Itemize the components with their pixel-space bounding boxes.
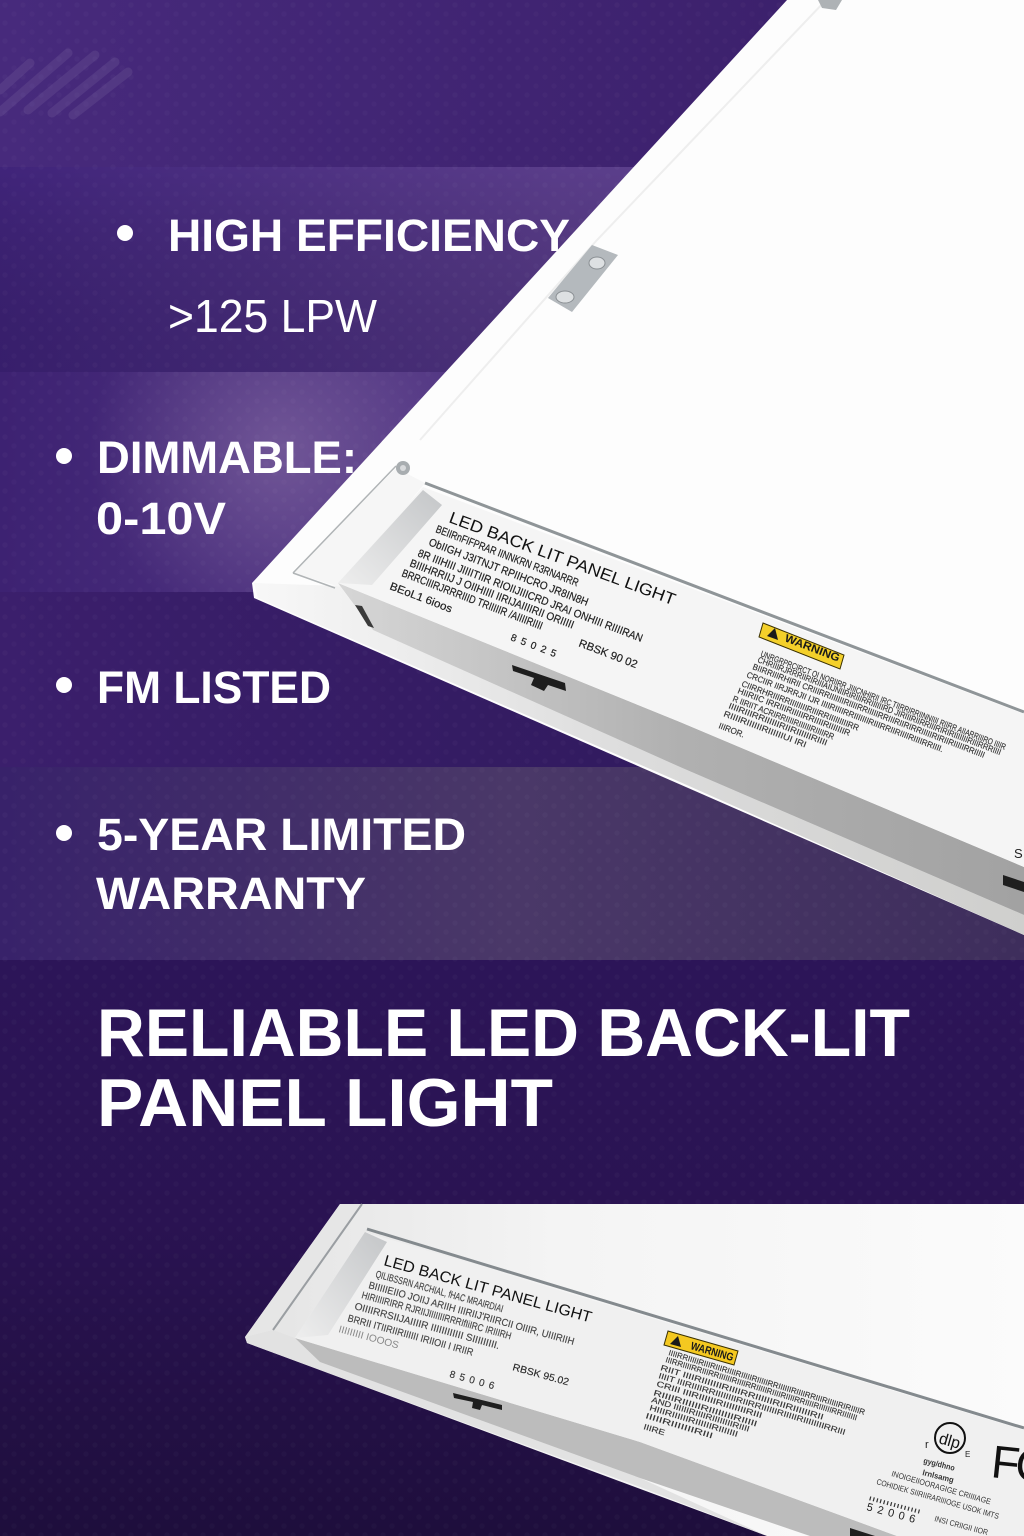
high efficiency label: HIGH EFFICIENCY — [168, 210, 570, 261]
frame band — [245, 1330, 767, 1536]
warning body text: IIIIRIIIRRIIIIIIRIIRIIIIIIRIIII — [727, 701, 829, 747]
dimming value: 0-10V — [96, 493, 226, 544]
label title: LED BACK LIT PANEL LIGHT — [382, 1252, 594, 1326]
mounting plate — [548, 245, 618, 312]
certification mark: E — [965, 1450, 970, 1459]
dimmable label: DIMMABLE: — [97, 432, 357, 483]
label spec text: BIIIIIEIIO JOIIJ ARIIH IIIRIIJ'RIIRCII OIIIR, UIIIRIIH — [367, 1280, 575, 1348]
warning body text: RIIIIRIIIIIIRIIIIIIIIRIIIII — [652, 1388, 758, 1428]
label spec text: IIIIIIIII IOOOS — [337, 1324, 400, 1352]
box side — [295, 1338, 897, 1536]
inner line — [273, 1204, 362, 1330]
warning body text: HIIRIIC IRRIIIRIIIIIRRIIIIRIIIIIIIR — [736, 686, 852, 738]
warning badge: WARNING — [689, 1340, 735, 1364]
label top rule — [425, 483, 1024, 712]
edge glyph: S — [1014, 846, 1023, 861]
frame left edge — [245, 1204, 362, 1337]
certification text: 5 2 0 0 6 — [865, 1501, 917, 1526]
warning body text: AND IIIIIIRIIIIRIIIIIIIIRIIII — [650, 1395, 751, 1434]
label spec text — [337, 1269, 575, 1392]
label face — [295, 1232, 1024, 1536]
label spec text: HIRIIIIRIRR RJRIIJIIIIIIIRRRIfIiIRC IRIIIRH — [360, 1290, 513, 1342]
title: PANEL LIGHT — [97, 1065, 553, 1141]
warning badge: WARNING — [783, 633, 841, 665]
title — [97, 995, 910, 1141]
label spec text: BRRCIIIRJRRRIIID TRIIIIIR /AIIIIRIIII — [400, 568, 544, 633]
certification text: gyg/dhno — [923, 1456, 956, 1473]
label spec text: RBSK 90 02 — [577, 638, 639, 671]
warning body text: IIIRRIIIIRRIIIRRIIIIIIRIIIIRRIIIIIRIIIIRIIIIRRIIIIRIIIIIIRRIIIIIII — [664, 1355, 858, 1422]
panel body — [252, 0, 1024, 935]
certification mark: r — [925, 1439, 929, 1451]
certification mark: dlp — [937, 1431, 962, 1453]
panel recess — [293, 468, 425, 587]
label face — [338, 487, 1024, 867]
label spec text: 8 5 0 0 6 — [448, 1369, 496, 1392]
upper panel light product image — [252, 0, 1024, 935]
bullet — [56, 677, 72, 693]
warning badge — [759, 623, 844, 669]
panel body — [245, 1204, 1024, 1536]
warning body text: RIIIIRIIIIIIRIIIIIIUI IRI — [722, 709, 808, 749]
lower panel light product image — [245, 1204, 1024, 1536]
warning body text: CRCIIR IIRJRRJII IJR IIIIRIIIIRRIIIIIIIRIIIRRIIRIIIIRIIIIRRIIII. — [745, 670, 945, 754]
label spec text: RBSK 95.02 — [511, 1362, 570, 1389]
warning body text: HIIIRIIIIIIRIIIIIIRIIIIIII — [648, 1403, 739, 1439]
silver strip — [338, 490, 442, 585]
label top rule — [367, 1229, 1024, 1428]
label spec text: 8 5 0 2 5 — [509, 633, 558, 660]
label spec text: 8R IIIHIII JIIIITIIR RIOIIJIIICRD JRAI ONHIII RIIIIRAN — [416, 548, 644, 645]
label spec text: BRRII ITIIRIIRIIIIII IRIIOII I IRIIR — [346, 1313, 474, 1359]
label spec text: QILIBSSRN ARCHIAL, fHAC MRAIRDIAI — [374, 1269, 504, 1315]
label spec text: BIIIHRRIIJ J OIIHIIII IIRIJAIIIIRII ORIIIII — [408, 558, 576, 632]
warranty line two: WARRANTY — [96, 868, 366, 919]
label title: LED BACK LIT PANEL LIGHT — [447, 509, 678, 609]
box side — [338, 583, 1024, 915]
FM listed label: FM LISTED — [97, 662, 331, 713]
certification text — [865, 1456, 1000, 1536]
warning body text: BIIRRIIIRHIRII CRIIIRRIIIIIIIRIIIIRRIIIIIRRIIIRIIRIRRIIIIIRIRIIRIIIIIRRIIIII — [751, 662, 986, 760]
screws — [396, 0, 842, 475]
certification text: INOIGEIIOORAGIGE CRIIIIAGE — [890, 1469, 992, 1506]
feature: FM listed — [56, 662, 331, 713]
connector slots — [453, 1393, 875, 1536]
warning body text: RIIT IIIIRIIIIIIIRIIIIRRIIIIIIRIIRIIIIIIRII — [659, 1363, 825, 1422]
warning body text — [642, 1348, 866, 1440]
warranty line one: 5-YEAR LIMITED — [97, 809, 466, 860]
warning body text: IIIRE — [642, 1422, 666, 1437]
certification text: lrnlsamg — [922, 1468, 955, 1485]
label spec text: OIIIIRRSIIJAIIIIR IIIIIIIIIIII SIIIIIIIII. — [353, 1301, 501, 1352]
certification text: IIIIIIIIIIIIIII — [867, 1496, 922, 1516]
decorative diagonal stripes — [0, 53, 128, 115]
label spec text: BEoL1 6ioos — [388, 581, 454, 616]
warning body text: IIIROR. — [717, 721, 746, 740]
warning body text: CIIRRHRIIIRRIIIIIIIIRIIIRRIIIIIIIIIRR — [740, 679, 861, 733]
silver strip — [295, 1232, 387, 1338]
bullet — [56, 448, 72, 464]
label spec text: BEIIRnFIFPRAR IINNKRN R3RNARRR — [434, 524, 580, 589]
bullet — [117, 225, 133, 241]
feature: high efficiency — [117, 210, 570, 342]
frame lower band — [254, 583, 1024, 935]
title: RELIABLE LED BACK-LIT — [97, 995, 910, 1071]
warning body text: CRIII IIIRIIIIIIRIIIIIIIIRIII — [655, 1379, 763, 1420]
warning body text: IIIIT IIIRIIIIRRIIIIIIIIRIIRRIIIIIIRIIIIIRIIIIIIIIRRIII — [657, 1371, 847, 1437]
certification mark — [925, 1423, 970, 1459]
warning badge — [664, 1331, 738, 1365]
crease line — [420, 0, 826, 440]
warning body text: R IIRIIT ACRIRRIIIIRIIIIIIRIIIIRR — [731, 694, 836, 742]
label spec text: ObIIGH J3ITNJT RPIIHCRO JR8IN8H — [427, 537, 590, 609]
warning body text: IIIIIRIIIIIIIRIII — [644, 1411, 714, 1440]
recess edge — [293, 466, 396, 588]
efficiency value: >125 LPW — [168, 290, 378, 342]
bullet — [56, 825, 72, 841]
feature: dimmable — [56, 432, 357, 544]
connector slots — [355, 605, 1024, 892]
label spec text — [388, 524, 644, 671]
certification text: COHIDIEK SIIRIIRARIIIOGE USOK IMTS — [875, 1477, 1000, 1521]
warning body text: IIIIRRIIIIIRIIIRIIIRIIIIRIIIIIRIIIIIRRIIIIIIRIIIIRRIIIRIIIIIRIRIIIIR — [667, 1348, 866, 1417]
feature: warranty — [56, 809, 466, 919]
